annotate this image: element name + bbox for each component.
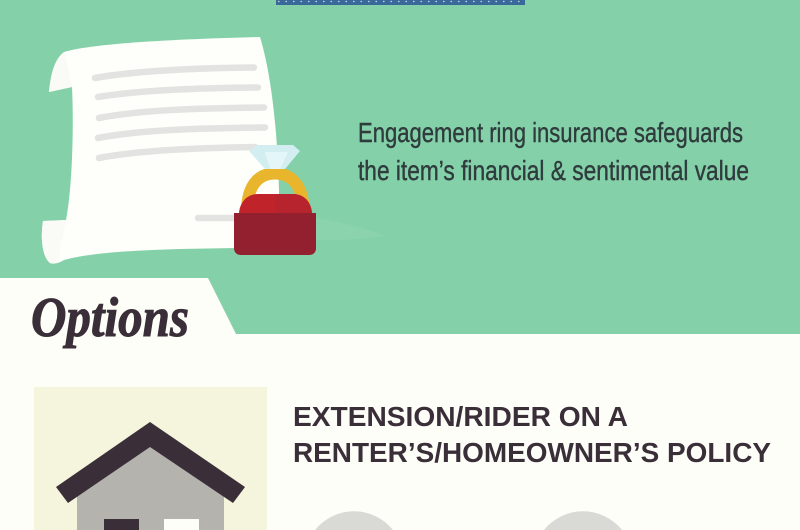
option title: RENTER’S/HOMEOWNER’S POLICY (293, 437, 771, 468)
option title: EXTENSION/RIDER ON A (293, 401, 628, 432)
options section background with tab (0, 278, 800, 530)
illustration: insurance document with ring box (42, 37, 385, 264)
icon circle: right (544, 511, 622, 530)
icon: house (56, 422, 245, 530)
ribbon banner bottom edge (276, 0, 525, 5)
heading: Options: Options (31, 287, 189, 349)
document text lines (95, 68, 265, 218)
panel: house illustration (34, 387, 267, 530)
icon circle: left (315, 511, 393, 530)
faint shadow (316, 218, 385, 240)
option title (293, 401, 771, 468)
document scroll (42, 37, 279, 264)
ring (247, 145, 304, 212)
intro text (358, 117, 749, 186)
ring box (234, 194, 316, 255)
